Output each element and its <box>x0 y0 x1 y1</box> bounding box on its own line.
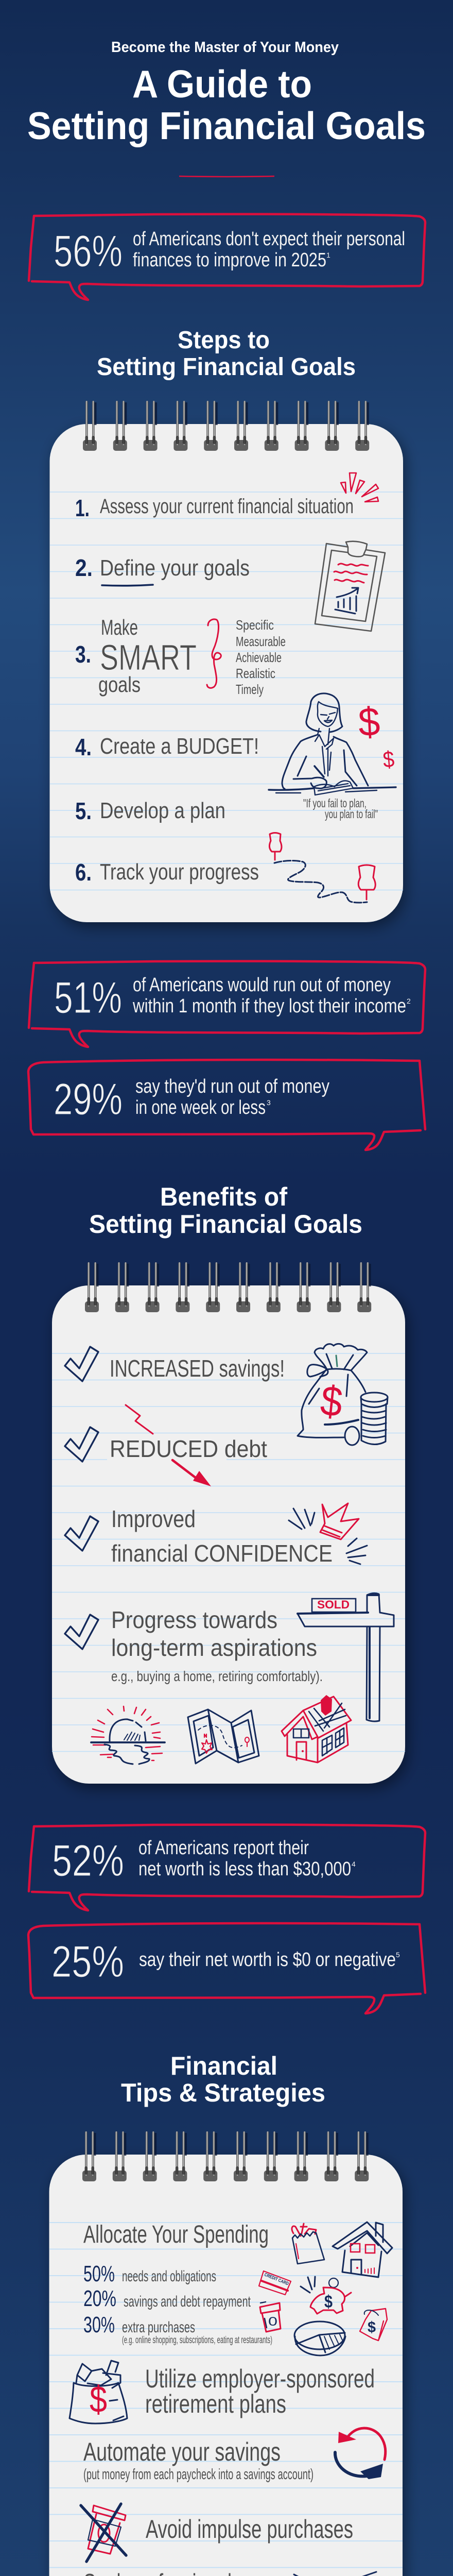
stat description: 5 <box>396 1951 400 1959</box>
icon: route with pins <box>269 833 375 903</box>
icon: sunset <box>91 1706 165 1764</box>
panel: tips notebook <box>49 2131 403 2576</box>
illustration: woman writing at desk <box>269 693 396 795</box>
icon: coffee cup: 0 <box>268 2315 277 2329</box>
icon: sold sign <box>298 1593 394 1721</box>
heading: benefits: Benefits of <box>160 1182 287 1211</box>
title: A Guide to <box>132 62 312 106</box>
stat description <box>133 228 405 271</box>
icon: credit card: CREDIT CARD <box>264 2272 290 2286</box>
tip: employer plans <box>145 2364 375 2418</box>
icon: red burst <box>341 473 378 502</box>
quote <box>303 796 378 821</box>
step 3: goals <box>98 672 141 697</box>
50 percent row: needs and obligations <box>122 2268 216 2285</box>
step 3: 3. <box>75 641 91 668</box>
kicker: Become the Master of Your Money <box>111 39 339 56</box>
quote: "If you fail to plan, <box>303 796 367 810</box>
step 5: Develop a plan <box>100 798 225 823</box>
SMART list: Specific <box>236 617 274 633</box>
benefit: long-term aspirations: Progress towards <box>111 1606 277 1633</box>
SMART list: Achievable <box>236 650 282 665</box>
heading: steps: Setting Financial Goals <box>97 353 356 381</box>
step 6 <box>75 859 259 886</box>
step 3: Make <box>101 615 138 639</box>
icon: retirement money bag: $ <box>90 2379 107 2420</box>
header <box>27 39 426 177</box>
step 2: 2. <box>75 554 93 581</box>
icon: red dollar signs: $ <box>357 699 381 745</box>
stat description <box>135 1076 329 1118</box>
step 4: Create a BUDGET! <box>100 734 259 759</box>
benefit: financial confidence: Improved <box>111 1505 196 1532</box>
step 5: 5. <box>75 798 92 824</box>
heading: steps: Steps to <box>178 327 270 354</box>
20 percent row: 20% <box>83 2286 116 2311</box>
step 1 <box>75 495 354 521</box>
tip: automate savings: (put money from each paycheck into a savings account) <box>83 2466 313 2483</box>
heading: steps <box>97 327 356 381</box>
icon: credit card <box>259 2271 291 2295</box>
title: Setting Financial Goals <box>27 104 426 147</box>
SMART list: Realistic <box>236 666 275 681</box>
spiral binding <box>83 401 369 451</box>
icon: grocery bag <box>292 2224 324 2264</box>
stat description: 1 <box>326 251 330 259</box>
step 4 <box>75 734 259 760</box>
step 6: 6. <box>75 859 92 886</box>
SMART list: Timely <box>236 682 264 697</box>
50 percent row: 50% <box>83 2261 115 2286</box>
stat description <box>138 1837 356 1880</box>
benefit: reduced debt: REDUCED debt <box>110 1435 267 1462</box>
30 percent row: extra purchases <box>122 2319 195 2336</box>
callout: 29% <box>28 1060 425 1150</box>
icon: red dollar signs <box>357 699 395 773</box>
stat: 56% <box>54 227 123 276</box>
arrow: falling red zigzag <box>126 1405 211 1486</box>
callout: 51% <box>29 961 425 1047</box>
tip: automate savings <box>83 2437 313 2483</box>
quote: you plan to fail" <box>325 807 378 821</box>
benefit: reduced debt <box>65 1427 267 1462</box>
step 2 <box>75 554 250 586</box>
benefit: long-term aspirations: long-term aspirations <box>111 1634 317 1661</box>
benefit: long-term aspirations: e.g., buying a home, retiring comfortably). <box>111 1668 323 1684</box>
benefit: increased savings <box>65 1347 285 1382</box>
stat description: 4 <box>352 1860 356 1868</box>
title underline <box>179 176 274 177</box>
panel: steps notebook <box>49 401 403 922</box>
step 1: 1. <box>75 495 90 521</box>
stat description: of Americans would run out of money <box>133 974 391 996</box>
heading: tips: Tips & Strategies <box>121 2078 325 2107</box>
SMART list <box>236 617 286 697</box>
tip: employer plans: Utilize employer-sponsored <box>145 2364 375 2393</box>
stat description: net worth is less than $30,000 <box>138 1858 351 1880</box>
stat: 52% <box>52 1836 124 1886</box>
icon: pie chart <box>294 2321 345 2355</box>
icon: folded map <box>188 1709 259 1764</box>
icon: bag dollar sign: $ <box>318 1377 345 1426</box>
step 3: SMART <box>100 637 197 677</box>
icon: red dollar signs: $ <box>382 747 395 773</box>
panel: benefits notebook <box>52 1262 405 1784</box>
step 4: 4. <box>75 734 92 760</box>
benefit: increased savings: INCREASED savings! <box>110 1355 285 1382</box>
stat: 29% <box>54 1075 123 1124</box>
icon: piggy bank <box>301 2277 351 2314</box>
stat description: in one week or less <box>135 1097 266 1118</box>
tip: allocate spending <box>83 2221 272 2346</box>
30 percent row: 30% <box>83 2312 115 2337</box>
icon: sold sign: SOLD <box>317 1598 350 1611</box>
spiral binding <box>85 1262 371 1312</box>
heading: benefits: Setting Financial Goals <box>89 1210 362 1239</box>
stat description: 2 <box>407 997 411 1005</box>
tip: automate savings: Automate your savings <box>83 2437 281 2466</box>
icon: red brace <box>207 619 221 688</box>
heading: tips: Financial <box>170 2052 277 2080</box>
icon: crossed-out coffee cup <box>81 2504 126 2562</box>
stat description: say their net worth is $0 or negative <box>139 1949 396 1971</box>
stat description: finances to improve in 2025 <box>133 249 326 271</box>
icon: crown with rays <box>289 1503 367 1564</box>
callout: 25% <box>28 1923 425 2013</box>
icon: price tag: $ <box>368 2319 376 2336</box>
heading: benefits <box>89 1182 362 1239</box>
stat: 25% <box>51 1937 124 1987</box>
tip: employer plans: retirement plans <box>145 2389 286 2418</box>
20 percent row: savings and debt repayment <box>124 2293 251 2310</box>
30 percent row: (e.g. online shopping, subscriptions, eating at restaurants) <box>122 2335 272 2346</box>
stat description <box>132 974 411 1017</box>
icon: retirement money bag <box>69 2361 127 2424</box>
50 percent row <box>83 2261 216 2286</box>
icon: price tag <box>360 2309 387 2341</box>
step 5 <box>75 798 225 824</box>
icon: handshake <box>277 2572 384 2576</box>
callout: 52% <box>29 1825 425 1910</box>
30 percent row <box>83 2312 272 2346</box>
callout: 56% <box>29 214 425 300</box>
20 percent row <box>83 2286 251 2311</box>
step 6: Track your progress <box>100 859 259 885</box>
benefit: long-term aspirations <box>65 1606 323 1684</box>
step 2: Define your goals <box>100 555 250 581</box>
icon: house <box>333 2222 392 2277</box>
icon: coffee cup <box>260 2302 281 2332</box>
tip: avoid impulse purchases: Avoid impulse purchases <box>146 2515 353 2544</box>
stat: 51% <box>54 973 122 1023</box>
heading: tips <box>121 2052 325 2107</box>
stat description: 3 <box>267 1098 271 1107</box>
step 1: Assess your current financial situation <box>100 495 354 518</box>
benefit: financial confidence <box>65 1505 333 1567</box>
title <box>27 62 426 147</box>
stat description: say they'd run out of money <box>135 1076 329 1097</box>
stat description: of Americans report their <box>138 1837 309 1859</box>
icon: house with solar roof <box>282 1695 351 1762</box>
tip: allocate spending: Allocate Your Spending <box>83 2221 269 2248</box>
spiral binding <box>82 2131 369 2181</box>
icon: clipboard <box>315 541 385 631</box>
step 3 <box>75 615 197 697</box>
icon: piggy bank: $ <box>324 2292 333 2312</box>
icon: money bag with coins <box>298 1344 388 1445</box>
benefit: financial confidence: financial CONFIDENCE <box>111 1540 333 1567</box>
SMART list: Measurable <box>236 634 286 649</box>
icon: cycle arrows <box>335 2428 386 2479</box>
